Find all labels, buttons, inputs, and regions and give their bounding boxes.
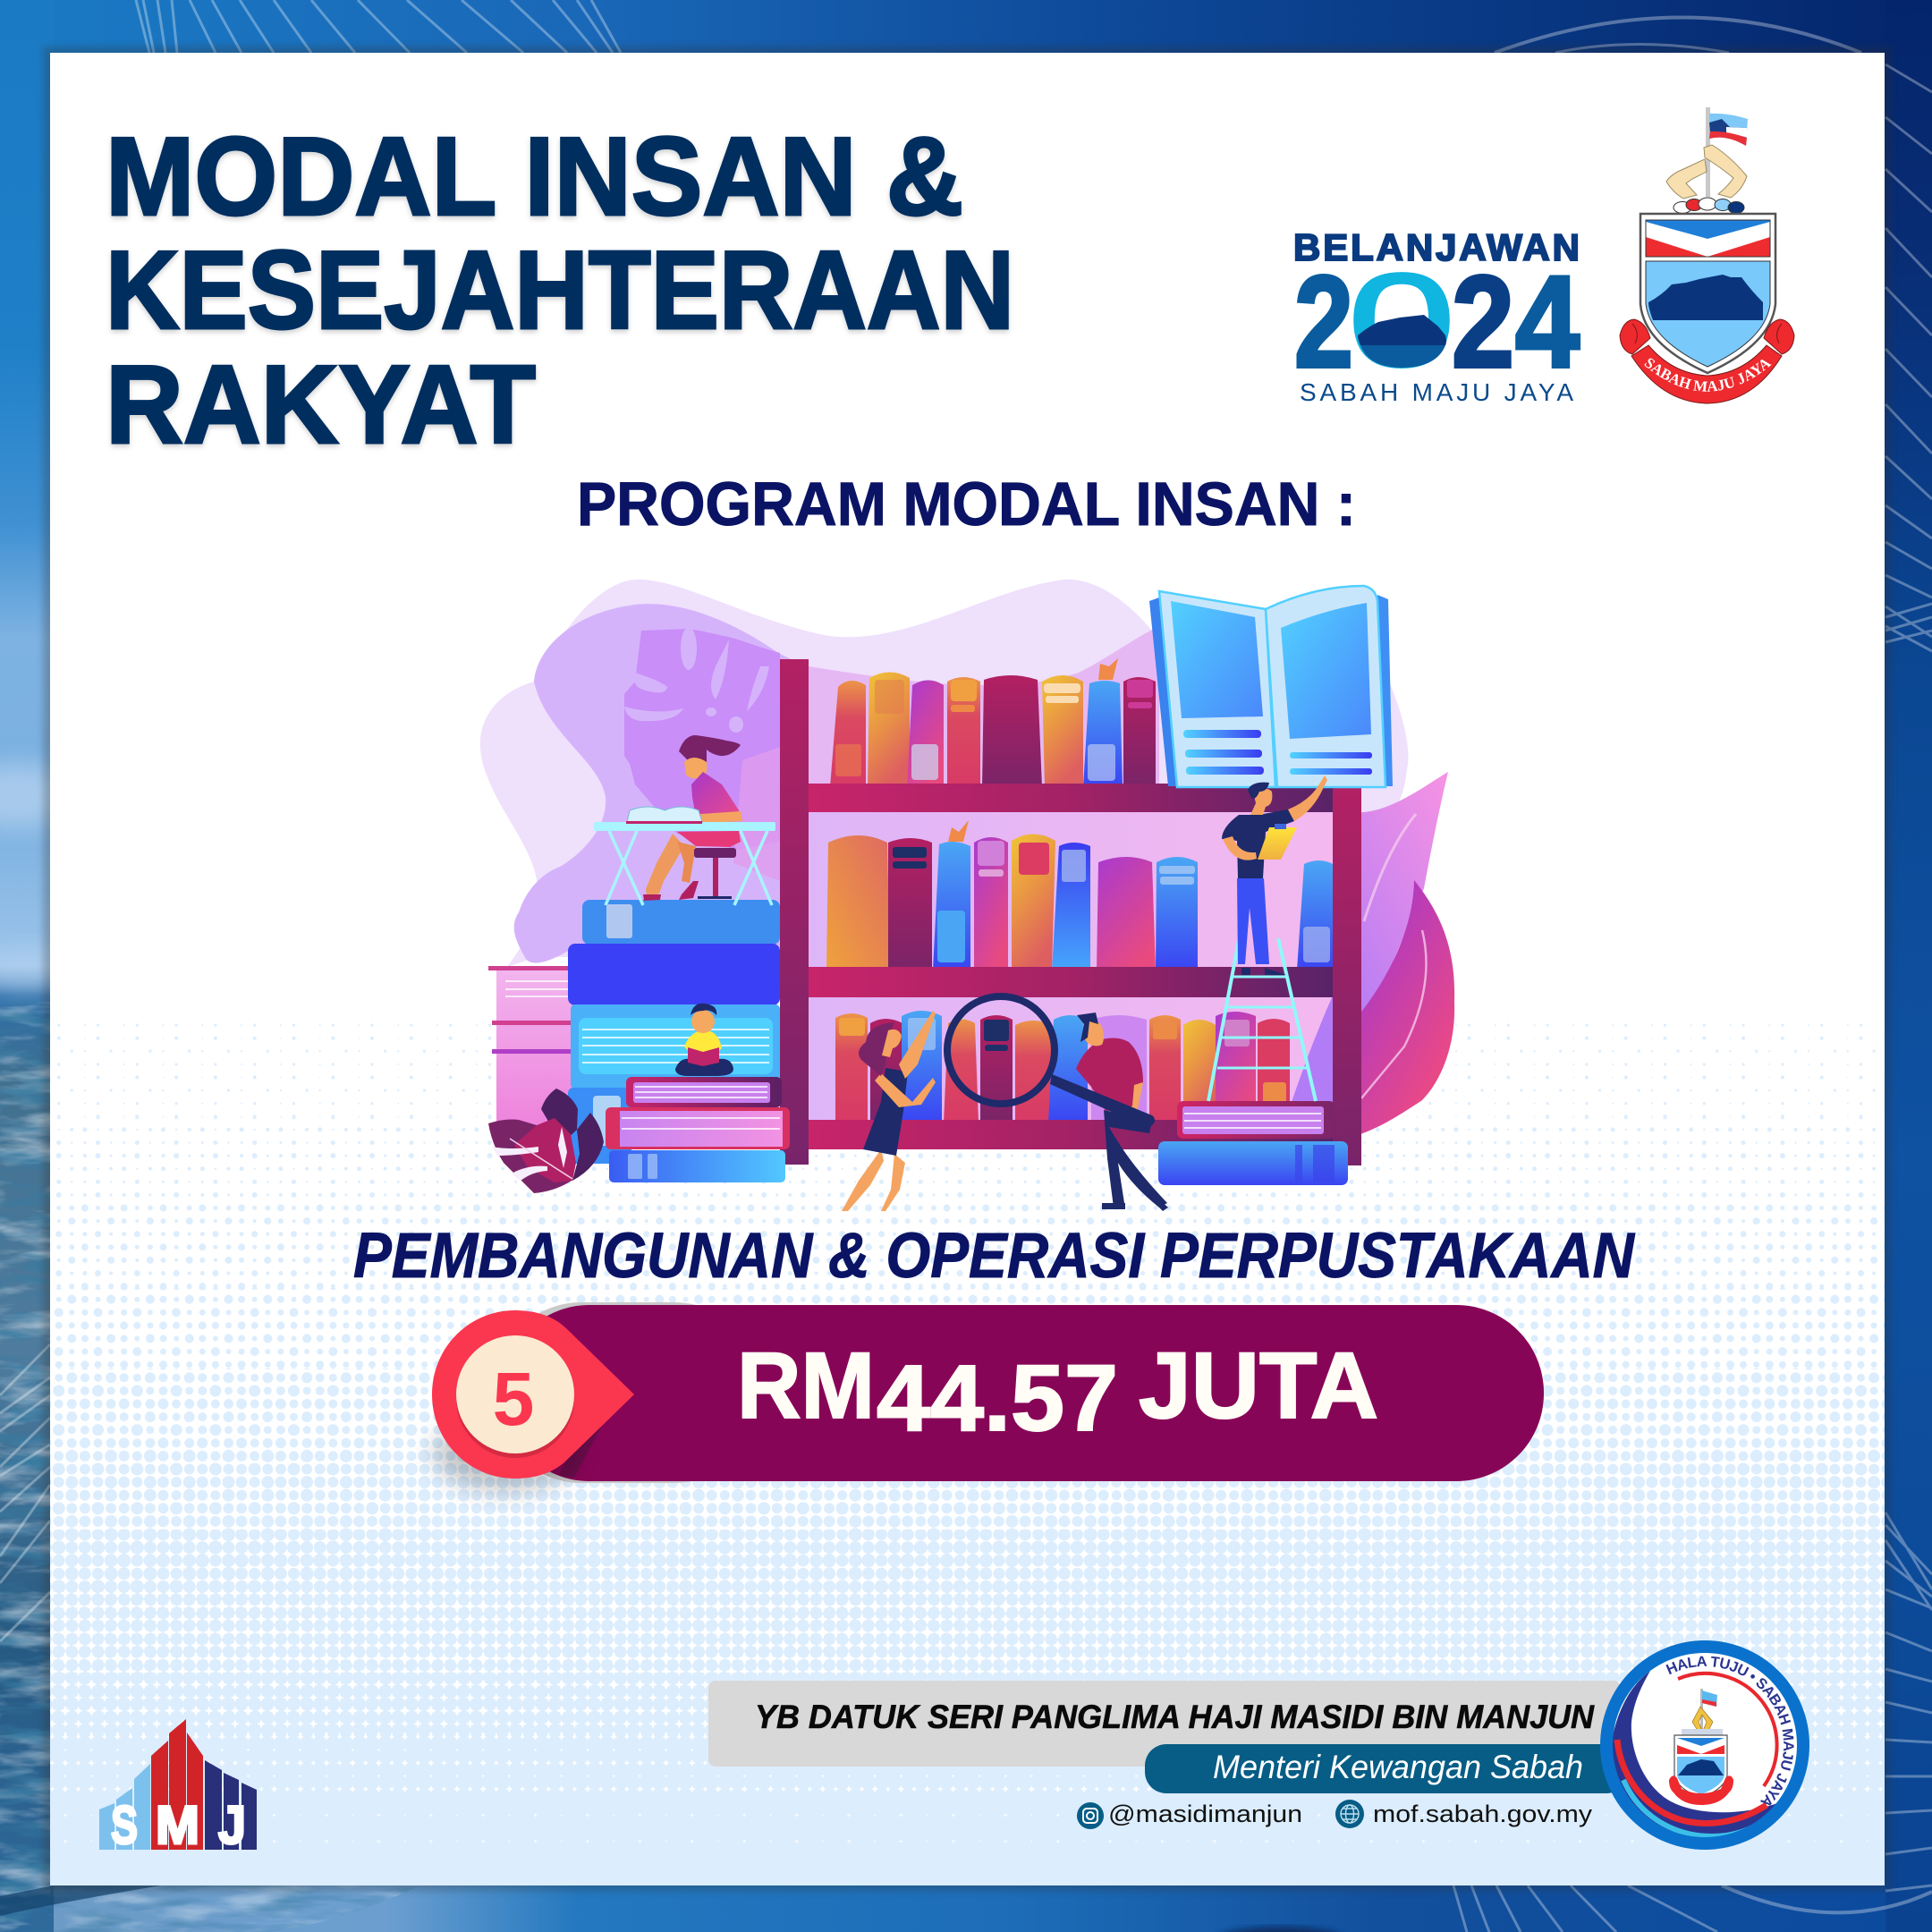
logo: Hala Tuju Sabah Maju Jaya badge: HALA TUJU • SABAH MAJU JAYA xyxy=(1665,1657,1794,1805)
open book on shelf xyxy=(1149,586,1393,787)
flag xyxy=(1706,107,1748,197)
logo: Belanjawan 2024: 2 xyxy=(1452,249,1514,394)
logo: Hala Tuju Sabah Maju Jaya badge xyxy=(1600,1640,1809,1850)
top shelf books xyxy=(830,658,1156,787)
minister title bar xyxy=(1145,1744,1628,1793)
logo: SMJ xyxy=(99,1719,257,1855)
amount text: 44.57 xyxy=(877,1346,1118,1451)
shelf back panel xyxy=(809,805,1333,1136)
purple leaf behind shelf xyxy=(1292,996,1333,1102)
logo: SMJ: J xyxy=(218,1795,246,1855)
logo: Sabah coat of arms xyxy=(1619,107,1794,404)
minister title bar: Menteri Kewangan Sabah xyxy=(1213,1749,1583,1785)
amount text: JUTA xyxy=(1139,1334,1378,1438)
shield xyxy=(1640,214,1775,373)
social handle: website: mof.sabah.gov.my xyxy=(1373,1801,1593,1827)
monstera leaf xyxy=(624,629,780,850)
heading: program modal insan: PROGRAM MODAL INSAN : xyxy=(577,470,1356,538)
logo: Belanjawan 2024: SABAH MAJU JAYA xyxy=(1300,378,1573,406)
dark monstera leaf xyxy=(488,1089,604,1193)
figure: woman with book xyxy=(842,1011,936,1211)
central book stack xyxy=(568,900,790,1182)
pink tinted back of top shelf xyxy=(809,626,1159,784)
beads xyxy=(1674,198,1744,213)
logo: Belanjawan 2024: 2 xyxy=(1294,249,1353,394)
middle shelf books xyxy=(826,820,1333,970)
right leaves xyxy=(1342,772,1454,1136)
minister name bar xyxy=(708,1681,1621,1767)
title: RAKYAT xyxy=(106,343,536,467)
background blobs xyxy=(480,580,1408,967)
ladder xyxy=(1208,938,1316,1101)
subheading: pembangunan dan operasi perpustakaan: PEMBANGUNAN & OPERASI PERPUSTAKAAN xyxy=(353,1221,1636,1292)
logo: Belanjawan 2024 xyxy=(1293,226,1580,406)
logo: Belanjawan 2024: 0 xyxy=(1348,247,1455,394)
motto ribbon xyxy=(1619,318,1794,404)
arms xyxy=(1666,145,1747,199)
right book stack xyxy=(1158,1101,1348,1185)
callout: funding amount pill xyxy=(432,1302,1544,1491)
illustration: library bookshelf xyxy=(480,580,1454,1211)
logo: Belanjawan 2024: BELANJAWAN xyxy=(1293,226,1580,268)
pill xyxy=(494,1302,1544,1483)
icon: instagram xyxy=(1077,1802,1104,1829)
logo: Belanjawan 2024: 4 xyxy=(1515,249,1580,394)
icon: globe xyxy=(1335,1800,1364,1828)
desk with open book xyxy=(594,807,775,905)
number marker: 5 xyxy=(493,1357,534,1441)
mini coat of arms xyxy=(1669,1689,1733,1805)
bottom shelf books xyxy=(835,1011,1290,1123)
amount text xyxy=(737,1334,1378,1451)
title: MODAL INSAN & xyxy=(106,115,963,239)
figure: magnifying glass and bearded man xyxy=(947,996,1168,1211)
logo: SMJ: S xyxy=(111,1795,138,1855)
amount text: RM xyxy=(737,1334,875,1438)
number marker xyxy=(432,1310,634,1491)
logo: SMJ: M xyxy=(156,1795,199,1855)
figure: boy reading xyxy=(675,1004,733,1076)
figure: girl at desk xyxy=(643,735,742,901)
figure: man on ladder xyxy=(1222,775,1327,975)
social handle: instagram: @masidimanjun xyxy=(1108,1801,1302,1827)
motto ribbon: SABAH MAJU JAYA xyxy=(1644,358,1772,392)
title xyxy=(106,115,1014,467)
minister name bar: YB DATUK SERI PANGLIMA HAJI MASIDI BIN MANJUN xyxy=(755,1699,1595,1735)
shelves and posts xyxy=(780,659,1361,1165)
left pink book stack xyxy=(488,966,579,1130)
title: KESEJAHTERAAN xyxy=(106,229,1014,352)
